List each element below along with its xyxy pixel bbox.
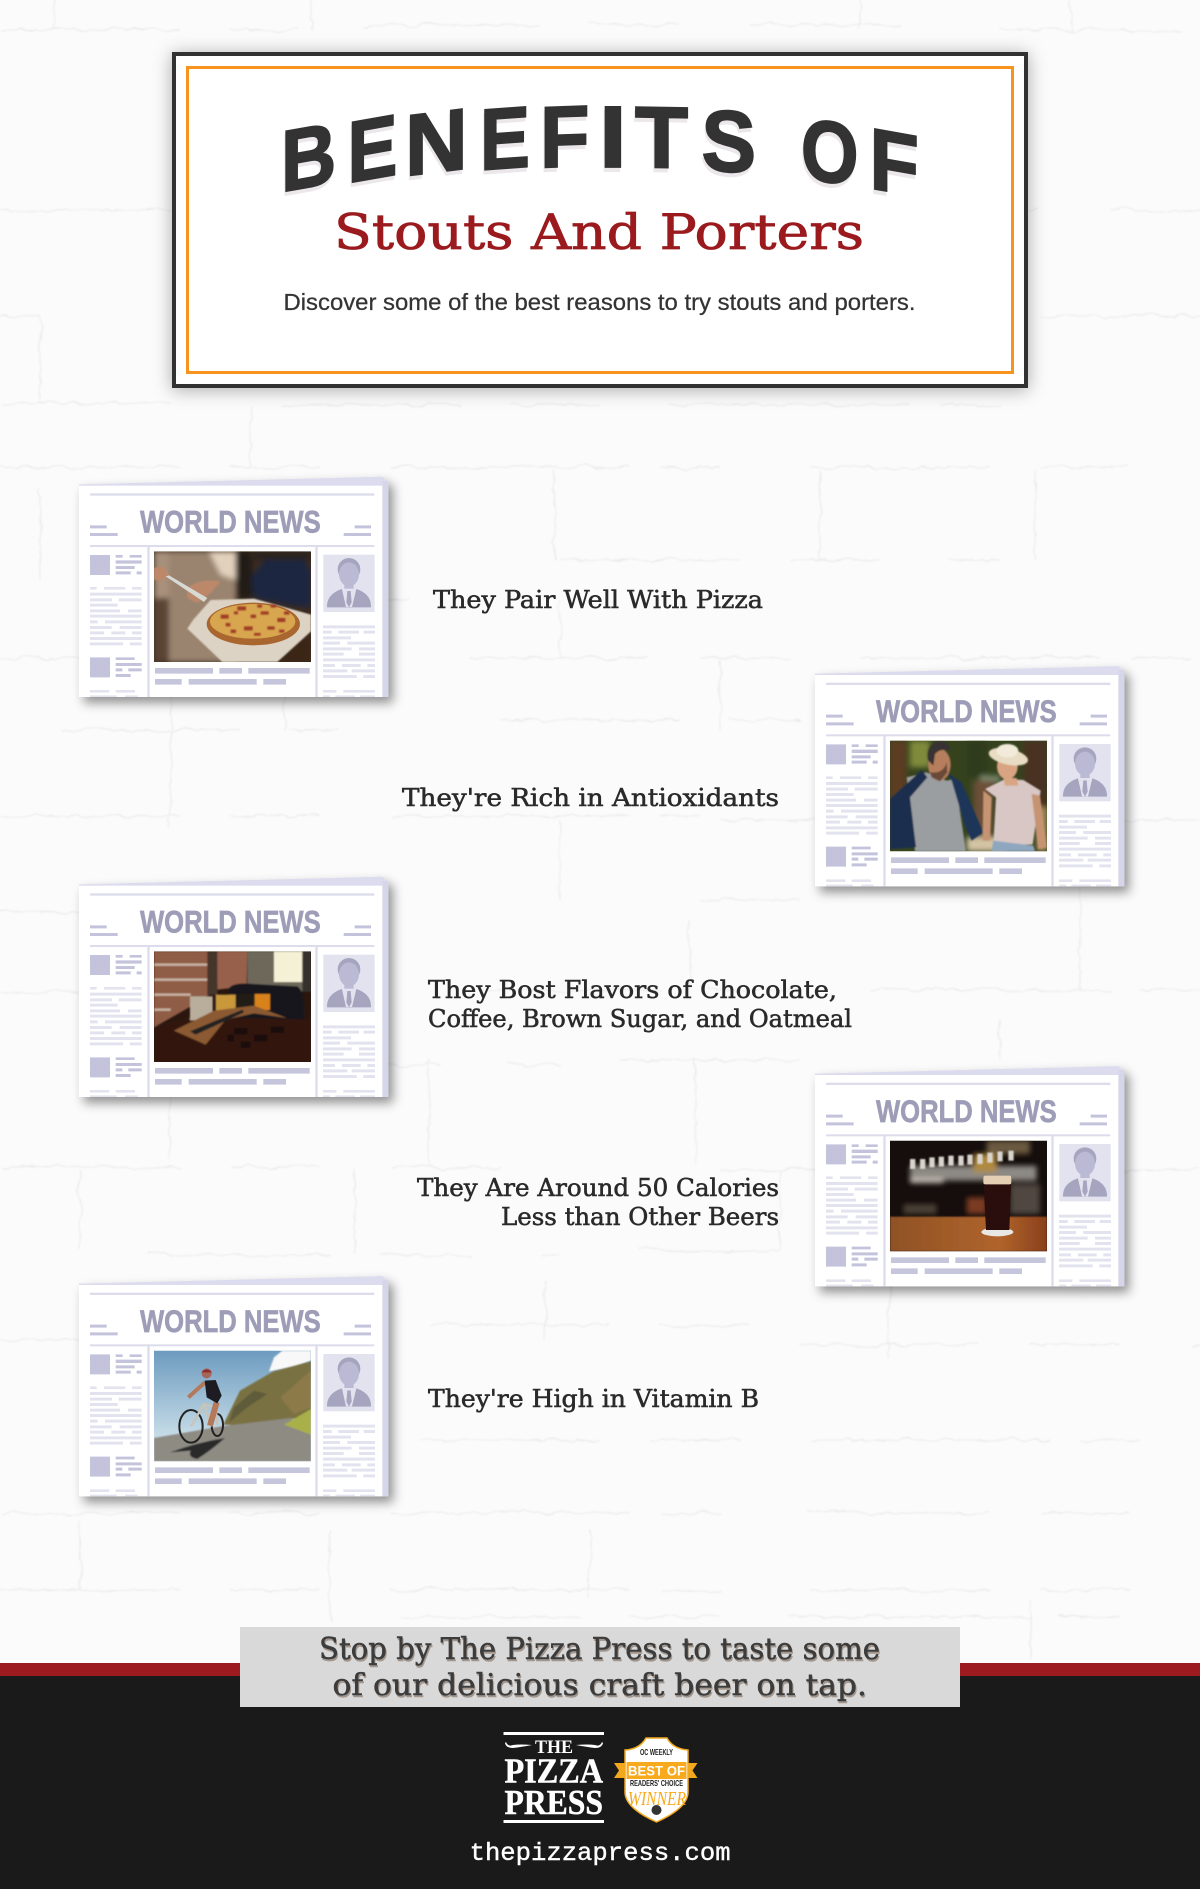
heading: Benefits of: E [480,88,530,189]
heading: Benefits of: E [348,96,397,202]
newspaper 4: pint of stout [815,1066,1124,1286]
newspaper 2: couple: WORLD NEWS [876,693,1057,729]
benefit 3 text: They Bost Flavors of Chocolate, [428,976,837,1004]
heading: Benefits of: S [702,92,756,191]
heading: Benefits of: I [599,88,627,186]
heading: Benefits of: N [405,90,468,195]
badge: Best Of Readers' Choice Winner [614,1738,698,1822]
title panel [174,54,1026,386]
website url: thepizzapress.com [470,1839,731,1868]
benefit 4 text [417,1174,779,1231]
badge: Best Of Readers' Choice Winner: OC WEEKLY [640,1748,673,1757]
photo: cyclist on a mountain road [154,1351,311,1461]
heading: Benefits of [281,87,919,215]
newspaper 1: pizza [79,477,388,697]
heading: Benefits of: F [870,109,919,215]
photo: beer flight on a table [154,951,311,1062]
subtitle: Stouts And Porters [334,204,864,261]
badge: Best Of Readers' Choice Winner: READERS' CHOICE [630,1778,683,1788]
newspaper 1: pizza: WORLD NEWS [140,504,321,540]
benefit 5 text: They're High in Vitamin B [428,1385,759,1413]
newspaper 4: pint of stout: WORLD NEWS [876,1093,1057,1129]
logo: The Pizza Press: THE [535,1737,573,1758]
heading: Benefits of: F [540,87,589,186]
heading: Benefits of: T [635,89,688,187]
newspaper 5: cyclist [79,1276,388,1496]
newspaper 3: beer flight [79,877,388,1097]
benefit 4 text: Less than Other Beers [501,1203,779,1231]
logo: The Pizza Press: PIZZA [504,1752,604,1790]
benefit 1 text: They Pair Well With Pizza [433,586,763,614]
newspaper 5: cyclist: WORLD NEWS [140,1303,321,1339]
call to action [240,1627,960,1707]
badge: Best Of Readers' Choice Winner: BEST OF [628,1762,685,1778]
benefit 3 text [428,976,852,1033]
benefit 4 text: They Are Around 50 Calories [417,1174,779,1202]
logo: The Pizza Press [504,1732,604,1823]
heading: Benefits of: O [801,102,859,204]
benefit 3 text: Coffee, Brown Sugar, and Oatmeal [428,1005,852,1033]
logo: The Pizza Press: PRESS [504,1783,603,1822]
benefit 2 text: They're Rich in Antioxidants [402,784,779,812]
newspaper 3: beer flight: WORLD NEWS [140,904,321,940]
call to action: Stop by The Pizza Press to taste some [319,1632,880,1667]
newspaper 2: couple [815,666,1124,886]
intro text: Discover some of the best reasons to try stouts and porters. [284,289,916,315]
footer band [0,1663,1200,1889]
heading: Benefits of: B [281,104,336,211]
photo: pizza on a peel [154,551,311,662]
photo: smiling couple outdoors [890,741,1047,851]
call to action: of our delicious craft beer on tap. [332,1668,867,1703]
badge: Best Of Readers' Choice Winner: WINNER [628,1788,686,1810]
photo: pint of stout on a bar [890,1141,1047,1251]
